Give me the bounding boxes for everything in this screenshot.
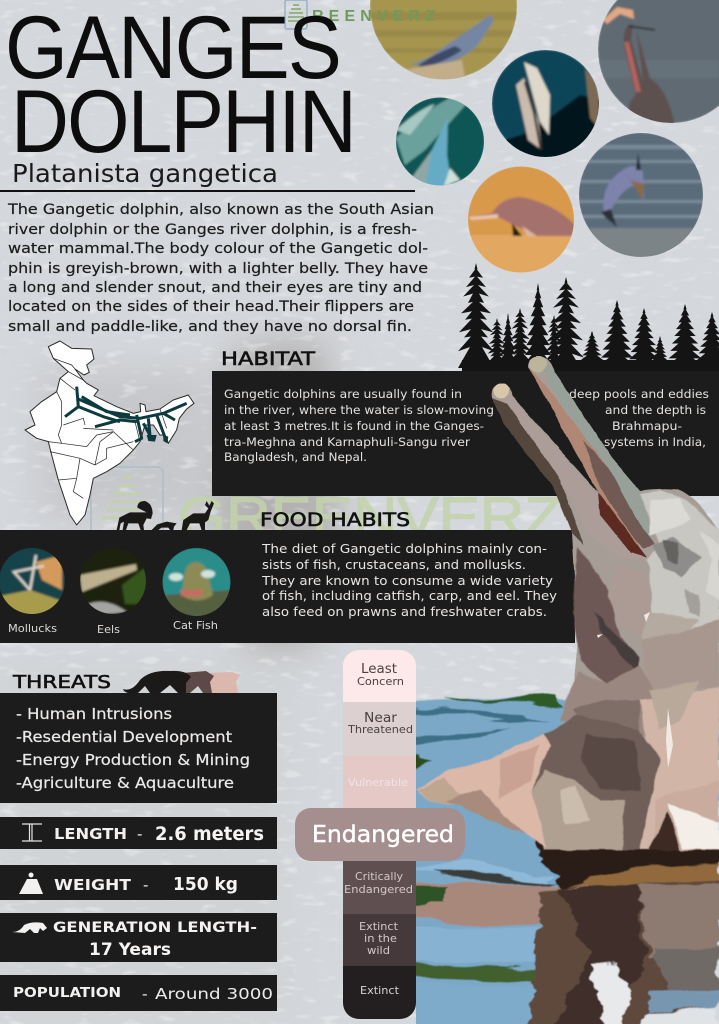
subtitle: scientific name: Platanista gangetica xyxy=(12,159,278,188)
intro text block xyxy=(7,202,434,335)
habitat text, left column: tra-Meghna and Karnaphuli-Sangu river xyxy=(224,435,470,449)
panel: threats list: -Energy Production & Mining xyxy=(16,751,250,769)
status: least concern: Least xyxy=(361,662,397,677)
status: least concern: Concern xyxy=(357,676,404,688)
status: least concern xyxy=(357,662,404,688)
panel: length: 2.6 meters xyxy=(155,823,264,845)
panel: threats list xyxy=(0,693,277,803)
habitat text, left column: at least 3 metres.It is found in the Ganges- xyxy=(224,419,484,433)
intro text block: water mammal.The body colour of the Gangetic dol- xyxy=(8,241,428,257)
status: endangered highlight xyxy=(295,808,465,861)
panel: population: POPULATION xyxy=(13,986,121,1001)
dolphin head and body xyxy=(418,490,719,850)
watermark: center logo xyxy=(91,467,562,562)
panel: weight: 150 kg xyxy=(173,874,238,895)
map of India with river range xyxy=(25,341,194,525)
panel: population: Around 3000 xyxy=(155,985,273,1003)
river water xyxy=(400,697,719,1024)
status: critically endangered: Endangered xyxy=(344,884,413,896)
photo: dolphin in sandy water xyxy=(368,0,520,84)
photo: pink dolphin on orange water xyxy=(467,166,575,275)
panel: generation length xyxy=(0,913,277,962)
watermark: top logo xyxy=(285,0,435,29)
habitat text, right column: Brahmapu- xyxy=(612,419,682,433)
icon: weight xyxy=(19,872,43,894)
habitat text, left column: in the river, where the water is slow-moving xyxy=(224,403,494,417)
status: extinct in the wild: Extinct xyxy=(359,921,398,933)
habitat text, left column: Gangetic dolphins are usually found in xyxy=(224,387,462,401)
panel: habitat xyxy=(212,371,719,496)
icon: i-beam xyxy=(22,824,42,841)
panel: threats list: - Human Intrusions xyxy=(16,705,172,723)
icon: prowling cats xyxy=(123,671,240,693)
habitat text, right column xyxy=(569,387,709,449)
status: extinct: Extinct xyxy=(360,985,399,997)
panel: weight xyxy=(0,865,277,900)
intro text block: a long and slender snout, and their eyes are tiny and xyxy=(8,280,422,296)
status: near threatened: Near xyxy=(364,711,398,726)
status: near threatened: Threatened xyxy=(347,724,413,736)
panel: generation length: 17 Years xyxy=(89,940,171,960)
intro text block: located on the sides of their head.Their flippers are xyxy=(8,299,414,315)
photo: eels xyxy=(79,547,147,616)
panel: threats list: -Resedential Development xyxy=(16,728,232,746)
photo: leaping dolphin xyxy=(578,132,704,258)
food text: sists of fish, crustaceans, and mollusks. xyxy=(262,557,526,572)
photo: dolphin in teal water xyxy=(395,96,485,188)
intro text block: The Gangetic dolphin, also known as the South Asian xyxy=(7,202,434,218)
panel: threats list: -Agriculture & Aquaculture xyxy=(16,774,234,792)
panel: population xyxy=(0,975,277,1011)
conservation status scale xyxy=(295,650,465,1019)
watermark: center logo: GREENVERZ xyxy=(178,485,562,548)
habitat text, right column: deep pools and eddies xyxy=(569,387,709,401)
food text: also feed on prawns and freshwater crabs. xyxy=(262,604,547,619)
habitat text, right column: and the depth is xyxy=(605,403,706,417)
panel: generation length: GENERATION LENGTH- xyxy=(53,920,257,936)
intro text block: phin is greyish-brown, with a lighter belly. They have xyxy=(8,261,428,277)
status: near threatened xyxy=(347,711,413,736)
habitat text, left column xyxy=(224,387,494,464)
photo: cat fish xyxy=(162,547,232,617)
animal silhouettes xyxy=(117,501,214,530)
dolphin highlights xyxy=(597,612,673,768)
panel: population: - xyxy=(142,985,148,1003)
food text xyxy=(261,541,558,619)
heading: threats: THREATS xyxy=(12,672,111,693)
panel: length xyxy=(0,817,277,849)
food labels xyxy=(8,619,218,636)
habitat text, right column: systems in India, xyxy=(604,435,706,449)
panel: length: - xyxy=(137,825,142,843)
status: endangered highlight: Endangered xyxy=(312,822,454,848)
forest silhouette xyxy=(458,263,719,373)
panel: length: LENGTH xyxy=(54,825,127,843)
status: critically endangered: Critically xyxy=(355,871,403,883)
status: critically endangered xyxy=(344,871,413,896)
status: extinct in the wild: in the xyxy=(364,933,397,945)
food labels: Cat Fish xyxy=(173,619,218,632)
photo: dolphin catching fish xyxy=(598,0,719,125)
status: extinct in the wild: wild xyxy=(367,945,390,957)
food labels: Eels xyxy=(97,623,120,636)
status: extinct in the wild xyxy=(359,921,398,957)
photo: dolphins from above xyxy=(492,50,602,160)
icon: leopard xyxy=(12,922,47,933)
habitat text, left column: Bangladesh, and Nepal. xyxy=(224,450,367,464)
food text: The diet of Gangetic dolphins mainly con- xyxy=(261,541,547,556)
title xyxy=(5,0,355,171)
photo: mollusks xyxy=(0,547,66,616)
panel: weight: WEIGHT xyxy=(54,876,132,894)
intro text block: small and paddle-like, and they have no dorsal fin. xyxy=(8,319,412,335)
status: vulnerable: Vulnerable xyxy=(348,777,408,789)
title: DOLPHIN xyxy=(11,71,355,171)
panel: weight: - xyxy=(143,876,148,894)
intro text block: river dolphin or the Ganges river dolphin, is a fresh- xyxy=(8,222,417,238)
panel: food habits xyxy=(0,530,575,643)
watermark: top logo: REENVERZ xyxy=(312,8,435,25)
heading: habitat: HABITAT xyxy=(221,348,315,370)
food labels: Mollucks xyxy=(8,622,57,635)
food text: They are known to consume a wide variety xyxy=(261,573,554,588)
food text: of fish, including catfish, carp, and eel. They xyxy=(262,588,558,603)
heading: food habits: FOOD HABITS xyxy=(260,509,410,531)
large dolphin illustration xyxy=(418,356,719,850)
dolphin beak xyxy=(492,356,719,760)
